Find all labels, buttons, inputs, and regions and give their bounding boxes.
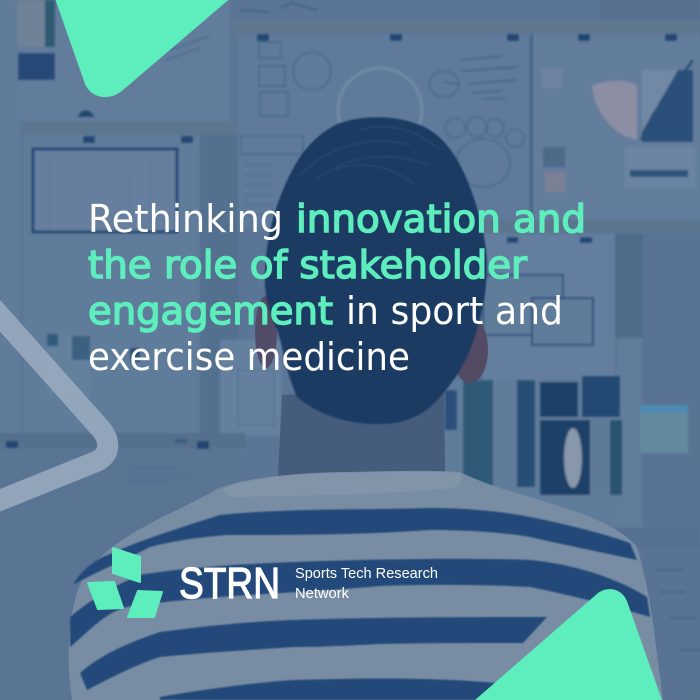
- centre right pictures: [445, 220, 700, 234]
- right ear: [452, 317, 488, 383]
- logo: STRN: [88, 548, 438, 617]
- hair highlights: [300, 127, 440, 185]
- logo mark: [88, 548, 162, 617]
- sweater stripes: [70, 508, 650, 700]
- right photos on sheet: [592, 81, 637, 140]
- headline line 1: [88, 197, 586, 242]
- sheet under sketches, left: [244, 165, 274, 215]
- headline line 1: Rethinking: [88, 197, 283, 242]
- headline: [88, 197, 586, 380]
- head silhouette: [265, 117, 487, 424]
- sketch sheet: [238, 34, 532, 229]
- headline line 1: innovation and: [296, 197, 586, 242]
- sweater: [69, 471, 663, 700]
- outlined triangle: left: [0, 300, 108, 506]
- sketch marks: [241, 42, 524, 187]
- sweater body: [69, 471, 663, 700]
- board sheet with dark frame: [23, 135, 200, 435]
- left ear: [255, 296, 277, 368]
- sweater collar: [224, 472, 462, 497]
- accent triangle: bottom right: [475, 589, 662, 700]
- logo wordmark: STRN: [179, 559, 280, 608]
- headline line 3: engagement: [88, 289, 333, 334]
- shelf strips: [20, 121, 238, 135]
- headline line 2: the role of stakeholder: [88, 243, 527, 288]
- headline line 4: exercise medicine: [88, 335, 410, 380]
- headline line 3: in sport and: [346, 289, 563, 334]
- logo tagline second line: Network: [295, 586, 350, 602]
- accent triangle: top: [52, 0, 240, 97]
- left column: [0, 0, 20, 450]
- headline line 3: [88, 289, 563, 334]
- neck: [278, 385, 445, 476]
- logo tagline: Sports Tech Research: [295, 566, 438, 582]
- left lower sheet items: [46, 335, 90, 397]
- top left sheet: [18, 0, 230, 122]
- clips: [257, 34, 269, 41]
